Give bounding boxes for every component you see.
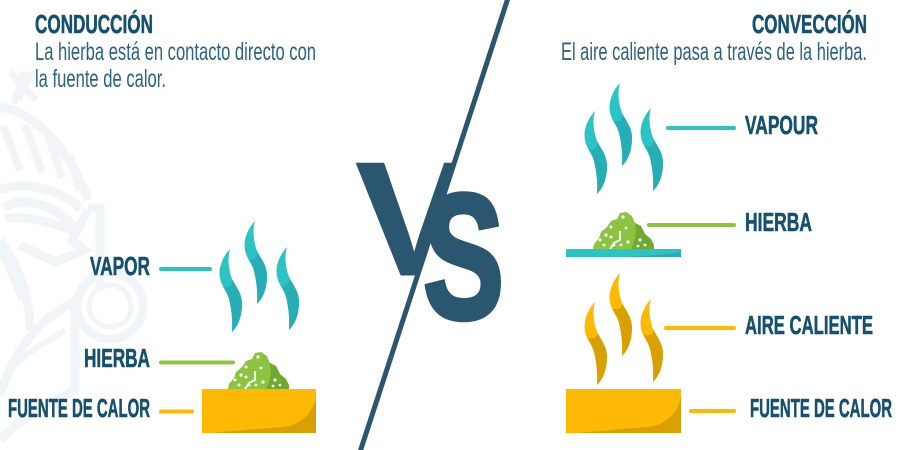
connector: hierba xyxy=(161,360,233,364)
description: conducción: La hierba está en contacto directo con xyxy=(35,38,316,66)
VS emblem with diagonal slash xyxy=(356,0,508,450)
diagonal slash xyxy=(360,0,508,450)
label: hierba: HIERBA xyxy=(84,345,150,373)
icon: heat source block xyxy=(566,389,681,433)
icon: heat source block xyxy=(202,389,316,433)
label: hierba: HIERBA xyxy=(745,209,812,237)
label: vapor: VAPOR xyxy=(90,253,150,281)
connector: fuente de calor xyxy=(691,409,734,413)
heading: conducción: CONDUCCIÓN xyxy=(35,9,153,39)
letter S: S xyxy=(423,157,504,356)
connector: fuente de calor xyxy=(161,410,192,414)
icon: vapour flames xyxy=(584,83,663,194)
panel: conducción xyxy=(8,9,316,433)
icon: herb pile on plate xyxy=(566,212,681,257)
connector: vapor xyxy=(161,267,210,271)
connector: aire caliente xyxy=(666,326,734,330)
icon: hot air flames xyxy=(584,273,663,385)
connector: hierba xyxy=(649,223,734,227)
description: conducción: la fuente de calor. xyxy=(35,65,166,93)
description: conducción xyxy=(35,38,316,93)
connector: vapour xyxy=(668,126,734,130)
panel: convección xyxy=(561,9,892,433)
icon: vapor flames xyxy=(220,221,299,332)
letter V: V xyxy=(356,130,472,310)
background watermark: warrior helmet xyxy=(0,72,143,440)
label: vapour: VAPOUR xyxy=(745,112,818,140)
label: fuente de calor: FUENTE DE CALOR xyxy=(8,395,150,423)
icon: herb pile xyxy=(228,352,289,389)
